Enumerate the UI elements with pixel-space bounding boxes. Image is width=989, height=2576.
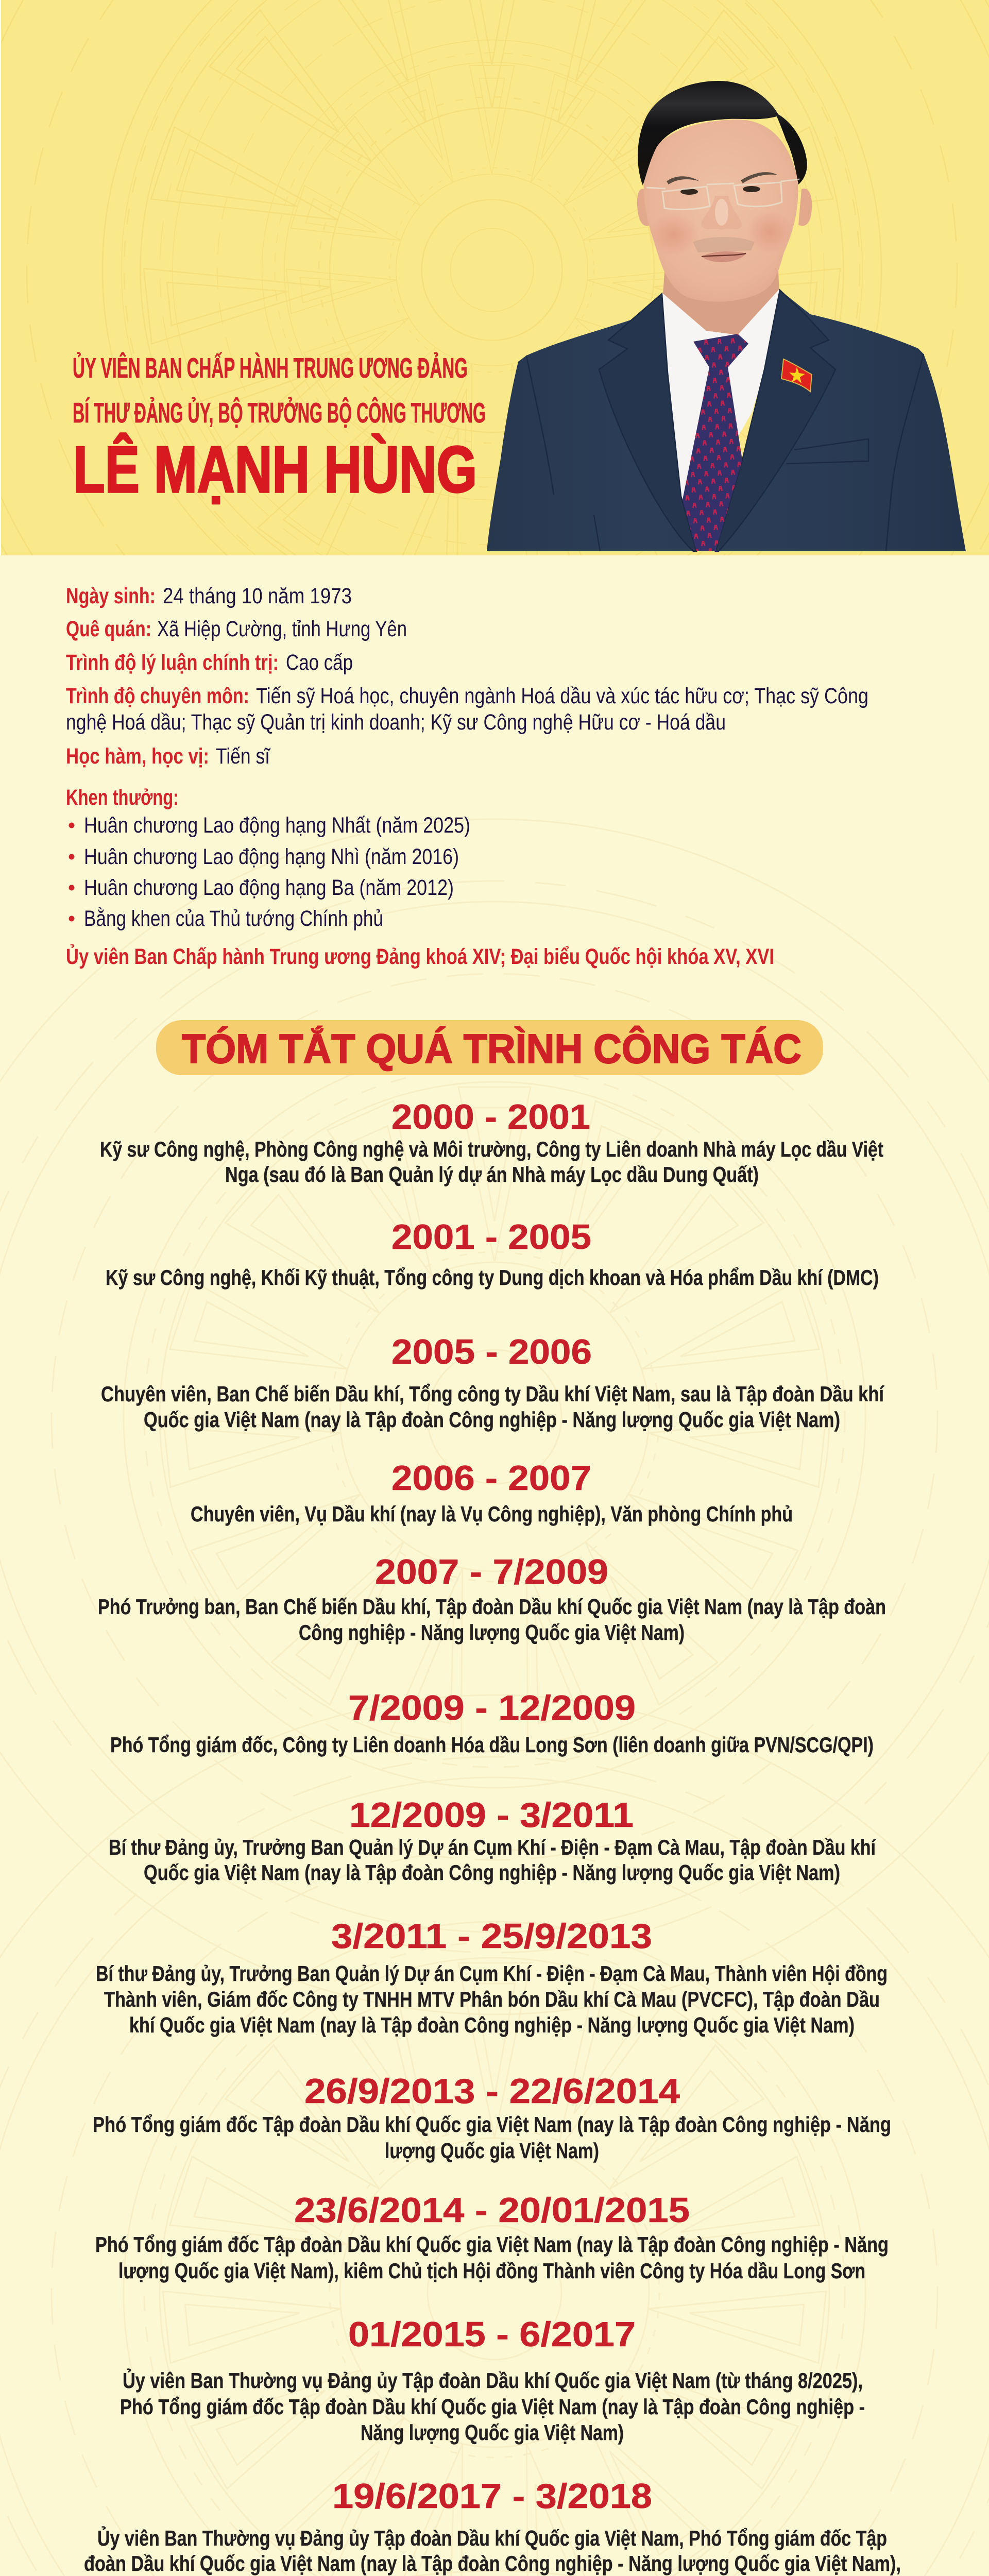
entry: 26/9/2013 - 22/6/2014: lượng Quốc gia Việt Nam): [385, 2139, 599, 2163]
date of birth: [66, 584, 352, 608]
entry: 12/2009 - 3/2011: Quốc gia Việt Nam (nay là Tập đoàn Công nghiệp - Năng lượng Quốc gia Việt Nam): [144, 1860, 840, 1885]
entry: 3/2011 - 25/9/2013: [96, 1917, 888, 2037]
entry: 01/2015 - 6/2017: [120, 2315, 865, 2445]
hometown: Xã Hiệp Cường, tỉnh Hưng Yên: [157, 617, 407, 641]
entry: 7/2009 - 12/2009: [110, 1688, 874, 1757]
mouth: [702, 251, 746, 262]
awards: Huân chương Lao động hạng Nhất (năm 2025): [84, 813, 470, 838]
entry: 12/2009 - 3/2011: [109, 1795, 876, 1885]
title: role line one: ỦY VIÊN BAN CHẤP HÀNH TRUNG ƯƠNG ĐẢNG: [73, 352, 468, 384]
panel: body background: [0, 555, 989, 2576]
entry: 3/2011 - 25/9/2013: 3/2011 - 25/9/2013: [331, 1917, 652, 1956]
panel: personal details: [66, 584, 868, 969]
entry: 2007 - 7/2009: Công nghiệp - Năng lượng Quốc gia Việt Nam): [299, 1620, 685, 1645]
awards: Khen thưởng:: [66, 785, 179, 810]
date of birth: Ngày sinh:: [66, 584, 156, 608]
national assembly pin: [781, 359, 812, 392]
stubble: [693, 237, 755, 252]
entry: 19/6/2017 - 3/2018: [84, 2477, 901, 2576]
entry: 2006 - 2007: [191, 1459, 793, 1526]
entry: 2005 - 2006: 2005 - 2006: [391, 1332, 592, 1371]
date of birth: 24 tháng 10 năm 1973: [163, 584, 352, 608]
title: role line two: BÍ THƯ ĐẢNG ỦY, BỘ TRƯỞNG BỘ CÔNG THƯƠNG: [73, 397, 486, 429]
professional qualifications: Tiến sỹ Hoá học, chuyên ngành Hoá dầu và xúc tác hữu cơ; Thạc sỹ Công: [256, 684, 868, 708]
entry: 2007 - 7/2009: 2007 - 7/2009: [375, 1552, 608, 1591]
academic title: Tiến sĩ: [216, 744, 271, 769]
entry: 2001 - 2005: 2001 - 2005: [391, 1217, 591, 1257]
entry: 23/6/2014 - 20/01/2015: 23/6/2014 - 20/01/2015: [294, 2191, 690, 2230]
entry: 26/9/2013 - 22/6/2014: 26/9/2013 - 22/6/2014: [304, 2072, 680, 2111]
entry: 2006 - 2007: 2006 - 2007: [391, 1459, 591, 1498]
entry: 2007 - 7/2009: [98, 1552, 886, 1645]
entry: 26/9/2013 - 22/6/2014: [93, 2072, 891, 2163]
entry: 2005 - 2006: [101, 1332, 884, 1432]
face: [644, 120, 798, 302]
entry: 01/2015 - 6/2017: 01/2015 - 6/2017: [348, 2315, 636, 2354]
political theory level: Trình độ lý luận chính trị:: [66, 650, 279, 675]
suit jacket: [487, 290, 966, 551]
necktie: [683, 334, 748, 551]
awards: Huân chương Lao động hạng Ba (năm 2012): [84, 875, 454, 900]
entry: 2005 - 2006: Quốc gia Việt Nam (nay là Tập đoàn Công nghiệp - Năng lượng Quốc gia Việt Nam): [144, 1408, 840, 1432]
jacket lapels: [599, 290, 835, 551]
panel: hero: [1, 0, 989, 555]
jacket seams: [526, 354, 924, 551]
political theory level: Cao cấp: [286, 650, 353, 675]
entry: 12/2009 - 3/2011: 12/2009 - 3/2011: [349, 1795, 634, 1835]
entry: 7/2009 - 12/2009: 7/2009 - 12/2009: [348, 1688, 636, 1727]
entry: 2000 - 2001: [100, 1097, 883, 1187]
awards: Bằng khen của Thủ tướng Chính phủ: [84, 906, 383, 931]
title: name: LÊ MẠNH HÙNG: [73, 433, 477, 506]
entry: 2000 - 2001: 2000 - 2001: [391, 1097, 590, 1137]
eyes: [680, 189, 698, 195]
neck: [662, 258, 780, 335]
star: [789, 367, 805, 383]
entry: 01/2015 - 6/2017: Năng lượng Quốc gia Việt Nam): [361, 2420, 624, 2445]
section banner: TÓM TẮT QUÁ TRÌNH CÔNG TÁC: [182, 1026, 802, 1072]
entry: 2001 - 2005: [106, 1217, 879, 1290]
hometown: Quê quán:: [66, 617, 151, 641]
portrait photo: [487, 81, 966, 551]
eyebrows: [667, 172, 778, 184]
hair: [638, 81, 807, 185]
shirt: [662, 289, 780, 515]
ears: [637, 189, 812, 226]
awards: Huân chương Lao động hạng Nhì (năm 2016): [84, 844, 459, 869]
glasses: [646, 179, 799, 210]
entry: 23/6/2014 - 20/01/2015: [95, 2191, 889, 2283]
professional qualifications: Trình độ chuyên môn:: [66, 684, 249, 708]
hometown: [66, 617, 407, 641]
party and national assembly positions: Ủy viên Ban Chấp hành Trung ương Đảng khoá XIV; Đại biểu Quốc hội khóa XV, XVI: [66, 944, 774, 969]
nose: [702, 196, 742, 230]
timeline: [64, 1097, 919, 2576]
professional qualifications: [66, 684, 868, 735]
cheeks: [648, 213, 700, 256]
entry: 2000 - 2001: Nga (sau đó là Ban Quản lý dự án Nhà máy Lọc dầu Dung Quất): [225, 1162, 759, 1187]
entry: 19/6/2017 - 3/2018: 19/6/2017 - 3/2018: [332, 2477, 652, 2516]
awards: [66, 785, 470, 931]
entry: 2006 - 2007: Chuyên viên, Vụ Dầu khí (nay là Vụ Công nghiệp), Văn phòng Chính phủ: [191, 1502, 793, 1526]
professional qualifications: nghệ Hoá dầu; Thạc sỹ Quản trị kinh doanh; Kỹ sư Công nghệ Hữu cơ - Hoá dầu: [66, 710, 726, 735]
academic title: Học hàm, học vị:: [66, 744, 209, 769]
